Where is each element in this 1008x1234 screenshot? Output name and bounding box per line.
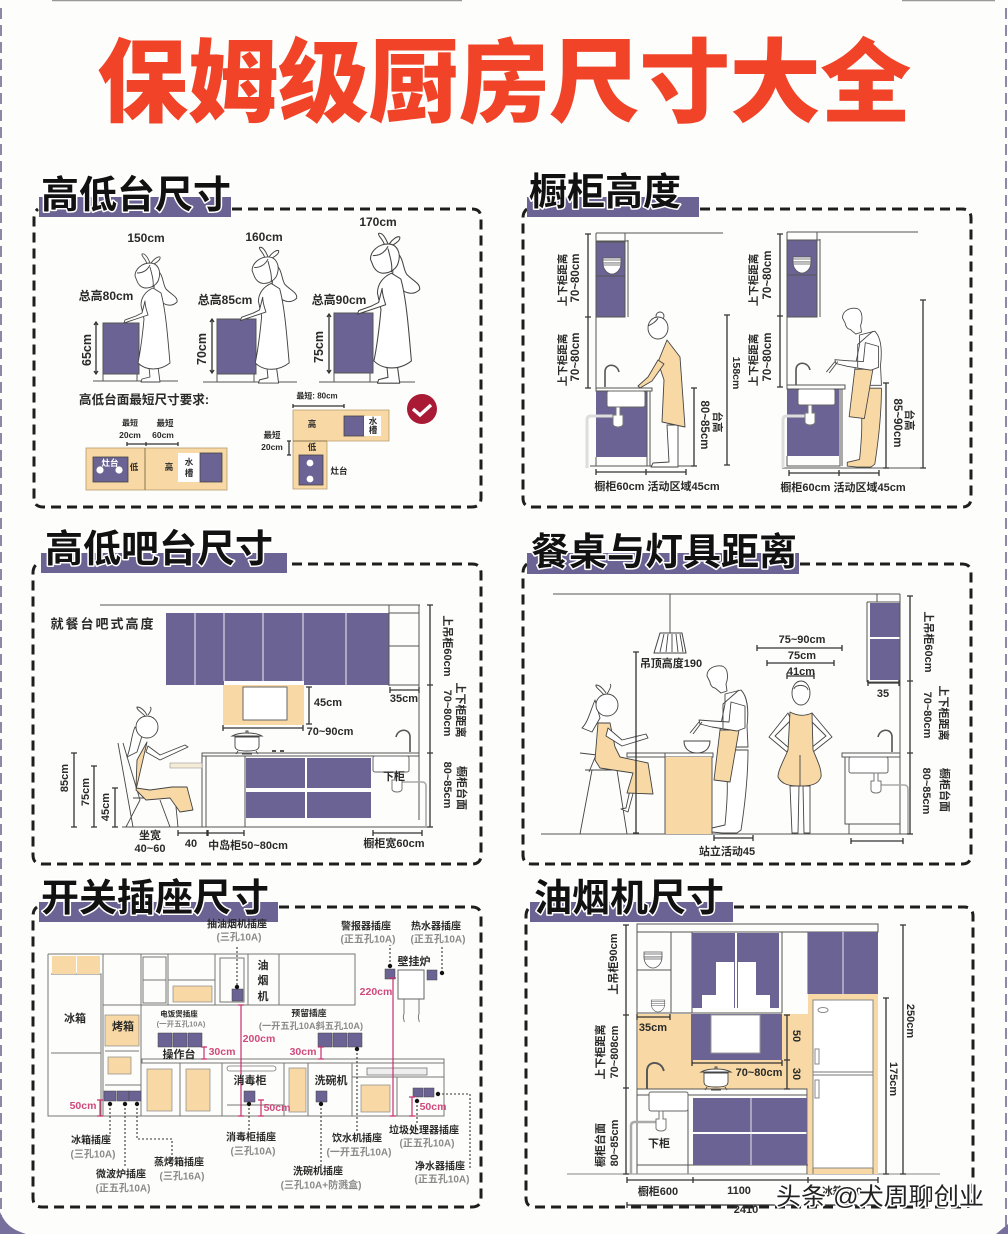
sink and upper cabinet (842, 594, 908, 834)
socket labels: 预留插座 (291, 1007, 327, 1018)
dimensions (633, 596, 952, 858)
dimensions: 30 (790, 1068, 802, 1080)
plan: L layout: 最短 (263, 430, 281, 440)
sockets (104, 969, 437, 1102)
subheading: 就餐台吧式高度 (50, 616, 156, 632)
subheading: 高低台面最短尺寸要求: (79, 392, 209, 407)
dimensions: 吊顶高度190 (640, 656, 702, 670)
dimensions: 75cm (788, 650, 816, 662)
dimensions: 41cm (787, 666, 815, 678)
dimensions: 45cm (100, 793, 112, 821)
heading: 高低台尺寸: 高低台尺寸 (41, 175, 231, 217)
dimensions: 中岛柜50~80cm (208, 838, 288, 852)
height labels: 150cm (127, 231, 165, 245)
dimensions: woman: 80~85cm (698, 401, 710, 449)
dimensions: 冰箱700 (822, 1184, 862, 1198)
dimensions: 2410 (734, 1204, 758, 1216)
socket top labels: (正五孔10A) (410, 934, 466, 946)
dimensions: 35 (877, 688, 889, 700)
dimensions: woman: 70~80cm (570, 333, 582, 381)
dimensions: 35cm (639, 1022, 667, 1034)
figure: man (690, 666, 748, 833)
plan: L layout: 20cm (261, 442, 283, 452)
dimensions: 80~85cm (609, 1119, 621, 1166)
dimensions: 80~85cm (441, 762, 453, 809)
backsplash and window (638, 1014, 808, 1090)
plan: L layout: 槽 (369, 425, 378, 435)
hood and splash (223, 685, 304, 725)
socket labels: (一开五孔10A) (157, 1018, 206, 1028)
pink dimension labels: 50cm (70, 1100, 96, 1112)
plan: L layout (261, 390, 389, 489)
socket top labels: 热水器插座 (411, 920, 461, 932)
plan: straight layout: 低 (130, 462, 139, 472)
plan: straight layout (86, 418, 227, 490)
pink dimension labels (70, 986, 446, 1114)
socket top labels: 警报器插座 (341, 920, 391, 932)
dimensions: woman: 橱柜60cm 活动区域45cm (594, 479, 720, 493)
plan: straight layout: 高 (165, 462, 173, 472)
height labels: 总高85cm (198, 292, 252, 307)
dimensions: 70~90cm (307, 726, 354, 738)
dimensions: 50 (790, 1030, 802, 1042)
title: 保姆级厨房尺寸大全 (97, 34, 911, 134)
appliance labels: 机 (258, 989, 268, 1003)
appliance labels: 洗碗机 (314, 1073, 348, 1087)
icon: pendant lamp (654, 594, 686, 653)
socket labels: 洗碗机插座 (293, 1164, 343, 1178)
dimensions: man (747, 234, 926, 494)
dimensions: man: 上下柜距离 (747, 254, 760, 306)
figure: woman front (769, 681, 832, 833)
dimensions: 70~80cm (921, 692, 933, 739)
dimensions: woman: 70~80cm (570, 254, 582, 302)
dimensions: 坐宽 (139, 828, 161, 842)
dimensions: 站立活动45 (699, 844, 755, 858)
icon: check badge (407, 394, 437, 424)
figure: man cooking (826, 308, 881, 467)
kitchen elevation (48, 954, 444, 1116)
dimensions: 上下柜距离 (593, 1024, 607, 1080)
dimensions: 上吊柜60cm (922, 611, 935, 673)
dimensions: woman: 台高 (711, 412, 724, 432)
plan: L layout: 水 (369, 416, 378, 426)
dimensions: man: 橱柜60cm 活动区域45cm (780, 480, 906, 494)
dimensions: 35cm (390, 693, 418, 705)
appliance labels: 烟 (258, 974, 268, 987)
dimensions: 橱柜台面 (938, 768, 952, 812)
appliance labels: 烤箱 (112, 1019, 134, 1033)
panel: 餐桌与灯具距离 (523, 532, 971, 864)
cabinets and floors (93, 313, 415, 382)
base cabinets (567, 1089, 940, 1174)
panel: 开关插座尺寸 (33, 878, 481, 1207)
socket labels: (一开五孔10A) (326, 1146, 392, 1158)
socket top labels (207, 918, 466, 946)
dimensions: man: 上下柜距离 (747, 334, 760, 386)
pink dimension labels: 50cm (264, 1102, 290, 1114)
dimensions: man: 台高 (903, 410, 916, 430)
rotated height labels (80, 331, 326, 366)
leader lines (108, 945, 470, 1168)
panel: 高低吧台尺寸 (33, 529, 481, 864)
rotated height labels: 70cm (195, 333, 209, 365)
pink dimension labels: 30cm (290, 1046, 316, 1058)
dimensions: 上吊柜90cm (607, 933, 620, 995)
dimensions: 橱柜台面 (593, 1123, 607, 1167)
dimensions: 75cm (80, 778, 92, 806)
dimensions: 1100 (727, 1185, 751, 1197)
pink dimension lines (97, 978, 415, 1116)
dimensions: 橱柜600 (638, 1184, 678, 1198)
socket labels: (正五孔10A) (95, 1182, 151, 1194)
plan: straight layout: 槽 (185, 468, 194, 478)
lower cabinets (122, 730, 427, 827)
plan: straight layout: 最短 (156, 418, 174, 428)
plan: straight layout: 60cm (152, 430, 174, 440)
dimensions: man: 85~90cm (891, 399, 903, 447)
pink dimension labels: 200cm (243, 1033, 275, 1045)
dimensions: 70~80cm (736, 1067, 783, 1079)
height labels (79, 215, 397, 307)
plan: straight layout: 灶台 (101, 458, 119, 468)
socket top labels: (三孔10A) (216, 932, 262, 944)
socket labels (70, 1007, 470, 1194)
dimensions (59, 605, 469, 855)
dimensions: 75~90cm (779, 634, 826, 646)
dimensions: 250cm (904, 1004, 916, 1038)
appliance labels: 操作台 (162, 1047, 196, 1061)
rotated height labels: 75cm (312, 331, 326, 363)
heading: 开关插座尺寸: 开关插座尺寸 (41, 878, 269, 920)
appliance labels: 消毒柜 (234, 1073, 266, 1087)
dimensions: 橱柜台面 (455, 766, 469, 810)
dimensions: 上下柜距离 (937, 686, 951, 740)
socket labels: 饮水机插座 (332, 1132, 382, 1144)
socket labels: (正五孔10A) (399, 1138, 455, 1150)
plan: straight layout: 最短 (122, 418, 138, 428)
appliance labels (64, 954, 430, 1087)
dimensions: 下柜 (648, 1137, 670, 1150)
socket labels: 垃圾处理器插座 (389, 1124, 459, 1136)
dimensions: woman: 上下柜距离 (556, 334, 569, 386)
plan: L layout: 高 (308, 419, 316, 429)
socket labels: (三孔10A) (70, 1148, 116, 1160)
appliance labels: 冰箱 (64, 1011, 86, 1025)
heading: 油烟机尺寸: 油烟机尺寸 (534, 878, 724, 920)
height labels: 总高80cm (79, 288, 133, 303)
panel: 油烟机尺寸 (526, 878, 973, 1216)
height labels: 160cm (245, 230, 283, 244)
rotated height labels: 65cm (80, 334, 94, 366)
plan: L layout: 最短: 80cm (296, 390, 338, 400)
dimensions: 上下柜距离 (454, 682, 468, 738)
appliance labels: 油 (258, 958, 268, 972)
panel: 高低台尺寸 (34, 175, 481, 507)
socket top labels: (正五孔10A) (340, 934, 396, 946)
plan: straight layout: 20cm (119, 430, 141, 440)
dimensions: 175cm (887, 1062, 899, 1096)
pink dimension labels: 30cm (209, 1046, 235, 1058)
socket labels: (三孔10A+防溅盒) (281, 1178, 361, 1192)
watermark: 头条 @犬周聊创业 (776, 1184, 984, 1210)
dimensions: 橱柜宽60cm (363, 836, 425, 850)
heading: 高低吧台尺寸: 高低吧台尺寸 (45, 529, 273, 571)
dimensions: 上吊柜60cm (441, 615, 454, 677)
socket labels: (三孔10A) (230, 1146, 276, 1158)
pink dimension labels: 220cm (360, 986, 392, 998)
figure: seated girl (118, 707, 193, 827)
kitchen elevation: man (782, 232, 925, 468)
dimensions: 80~85cm (920, 768, 932, 815)
figure: woman at sink (638, 312, 685, 467)
upper cabinets (100, 605, 420, 820)
pink dimension labels: 50cm (420, 1101, 446, 1113)
dimensions: 45cm (314, 697, 342, 709)
dimensions: 40~60 (135, 843, 165, 855)
icon: bowl (684, 741, 710, 753)
upper cabinets and hood (637, 924, 878, 1174)
dimensions: 85cm (59, 764, 71, 792)
socket labels: (一开五孔10A斜五孔10A) (259, 1020, 363, 1031)
dimensions: woman (556, 234, 742, 493)
socket labels: 冰箱插座 (71, 1134, 111, 1146)
socket labels: 净水器插座 (415, 1160, 465, 1172)
figures: three girls (124, 233, 420, 383)
socket labels: 蒸烤箱插座 (154, 1156, 204, 1168)
appliance labels: 壁挂炉 (398, 954, 430, 968)
socket labels: 微波炉插座 (96, 1168, 146, 1180)
plan: straight layout: 水 (185, 457, 194, 467)
plan: L layout: 低 (308, 442, 317, 452)
heading: 橱柜高度: 橱柜高度 (529, 172, 681, 214)
panel: 橱柜高度 (523, 172, 971, 507)
socket labels: 电饭煲插座 (160, 1008, 198, 1018)
plan: L layout: 灶台 (330, 466, 348, 476)
dimensions: 40 (185, 838, 197, 850)
dimensions: man: 70~80cm (762, 251, 774, 299)
heading: 餐桌与灯具距离: 餐桌与灯具距离 (531, 532, 797, 574)
dimensions: man: 70~80cm (762, 333, 774, 381)
dimensions: 下柜 (383, 770, 405, 783)
structure: ceiling, floor, counter (541, 594, 910, 834)
dimensions: woman: 158cm (730, 357, 742, 389)
socket top labels: 抽油烟机插座 (207, 918, 267, 930)
socket labels: (正五孔10A) (414, 1174, 470, 1186)
height labels: 170cm (359, 215, 397, 229)
dimensions: 70~80cm (441, 690, 453, 737)
dimensions: woman: 上下柜距离 (556, 254, 569, 306)
height labels: 总高90cm (312, 292, 366, 307)
dimensions: 70~808cm (609, 1025, 621, 1078)
dimensions (593, 925, 916, 1216)
kitchen elevation: woman (587, 233, 723, 468)
fridge (808, 994, 878, 1174)
socket labels: 消毒柜插座 (226, 1130, 276, 1144)
socket labels: (三孔16A) (159, 1170, 205, 1182)
figure: girl on stool (580, 684, 653, 834)
